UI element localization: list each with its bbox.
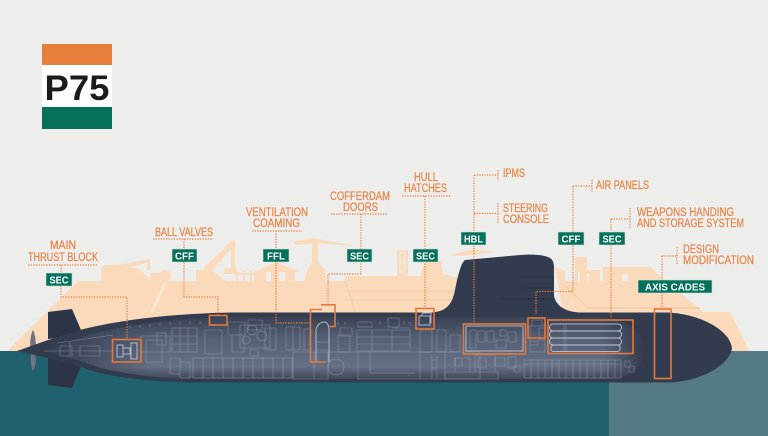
pylon — [397, 250, 408, 276]
callout: cofferdam doors: SEC — [350, 250, 369, 262]
callout: main thrust block: MAIN — [50, 240, 76, 252]
hull and sail — [17, 255, 732, 382]
callout: hull hatches: HULL — [414, 172, 438, 184]
callout: IPMS and steering console: HBL — [464, 234, 484, 246]
callout: cofferdam doors: DOORS — [343, 202, 378, 214]
callout: ball valves: CFF — [175, 250, 195, 262]
callout: IPMS and steering console: IPMS — [503, 168, 525, 180]
upper rudder — [48, 309, 81, 339]
interior: weapons store — [524, 324, 634, 378]
callout: hull hatches: SEC — [416, 250, 435, 262]
crane lattice — [196, 240, 237, 281]
callout: main thrust block: THRUST BLOCK — [28, 252, 98, 264]
interior: control room — [455, 320, 545, 372]
callout: weapons handling and storage system — [548, 207, 744, 354]
callout: ventilation coaming — [246, 207, 326, 362]
callout: ventilation coaming: VENTILATION — [246, 207, 308, 219]
callout: design modification: MODIFICATION — [683, 255, 754, 267]
callout: air panels: AIR PANELS — [596, 180, 649, 192]
interior: mid compartments — [292, 318, 498, 379]
shipyard silhouette background — [7, 238, 750, 352]
logo: P75 — [42, 44, 112, 129]
callout: design modification — [638, 244, 754, 378]
callout: cofferdam doors: COFFERDAM — [330, 191, 390, 203]
interior: engines — [228, 320, 310, 356]
callout: air panels — [528, 180, 649, 338]
water — [0, 351, 768, 436]
propeller — [30, 330, 36, 371]
callout: design modification: AXIS CADES — [645, 282, 705, 294]
right side buildings — [555, 257, 750, 352]
crane left — [101, 259, 150, 281]
callout: ball valves: BALL VALVES — [155, 227, 213, 239]
callout: main thrust block: SEC — [50, 274, 69, 286]
callout: hull hatches — [402, 172, 451, 329]
callout: IPMS and steering console — [461, 168, 549, 354]
callout: cofferdam doors — [321, 191, 390, 326]
callout: ventilation coaming: FFL — [267, 250, 286, 262]
tower crane — [293, 238, 356, 281]
callout: IPMS and steering console: STEERING — [503, 203, 548, 215]
callout: ball valves — [153, 227, 227, 325]
callout: design modification: DESIGN — [683, 244, 719, 256]
callout: weapons handling and storage system: AND STORAGE SYSTEM — [637, 218, 744, 230]
callout: IPMS and steering console: CONSOLE — [503, 214, 549, 226]
shipyard window cut-outs — [152, 253, 700, 312]
lower rudder — [48, 358, 82, 388]
interior: aft machinery — [44, 321, 292, 378]
logo: P75: P75 — [44, 69, 110, 108]
callout: weapons handling and storage system: SEC — [602, 234, 622, 246]
callout: main thrust block — [28, 240, 141, 362]
callout: hull hatches: HATCHES — [404, 183, 447, 195]
callout: ventilation coaming: COAMING — [253, 218, 300, 230]
sail lines — [500, 277, 553, 299]
hull interior — [45, 317, 644, 379]
callout: air panels: CFF — [562, 234, 581, 246]
callout: weapons handling and storage system: WEAPONS HANDING — [637, 207, 734, 219]
shed — [254, 262, 300, 281]
submarine — [17, 255, 732, 388]
